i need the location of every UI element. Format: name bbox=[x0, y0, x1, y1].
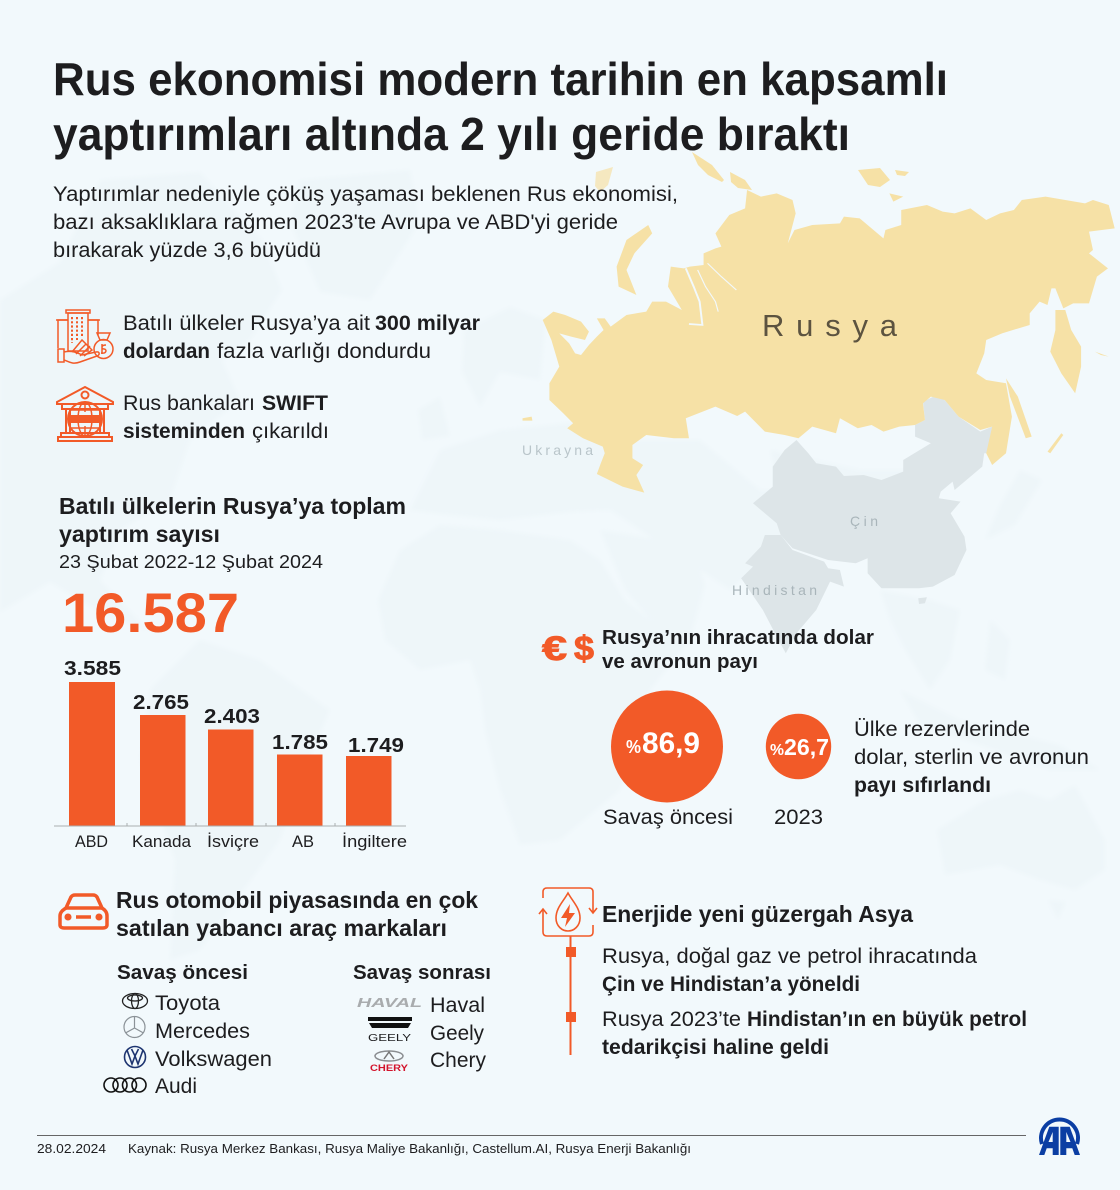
map label: Hindistan: Hindistan bbox=[732, 582, 817, 598]
text: energy notes: Rusya 2023’te bbox=[602, 1007, 741, 1031]
subtitle text block bbox=[53, 182, 678, 262]
bar chart: sanctions by country: 1.785 bbox=[272, 731, 328, 754]
text: reserves note bbox=[854, 717, 1089, 797]
list: post-war brands: GEELY bbox=[368, 1033, 411, 1044]
bar chart: sanctions by country: 3.585 bbox=[64, 657, 121, 680]
icon: euro and dollar bbox=[542, 630, 594, 668]
text: SWIFT removal: Rus bankaları bbox=[123, 392, 255, 415]
text: energy notes: Çin ve Hindistan’a yöneldi bbox=[602, 972, 860, 996]
map label: Rusya: Rusya bbox=[762, 308, 898, 343]
list: post-war brands: Geely bbox=[430, 1021, 484, 1045]
icon: building, hand and money bag bbox=[56, 310, 113, 363]
car section heading: Rus otomobil piyasasında en çok bbox=[116, 887, 479, 913]
bar chart: sanctions by country: 2.403 bbox=[204, 705, 260, 728]
circle: 2023 share: % bbox=[770, 742, 784, 759]
icon: energy drop with arrows bbox=[539, 888, 597, 936]
text: SWIFT removal bbox=[123, 392, 329, 443]
list: pre-war brands: Volkswagen bbox=[155, 1047, 272, 1071]
circle: 2023 share bbox=[766, 714, 831, 829]
text: energy notes: tedarikçisi haline geldi bbox=[602, 1035, 829, 1059]
text: SWIFT removal: sisteminden bbox=[123, 420, 245, 443]
list: pre-war brands: Savaş öncesi bbox=[117, 961, 248, 984]
circle: pre-war share: 86,9 bbox=[642, 727, 700, 760]
subtitle text block: Yaptırımlar nedeniyle çöküş yaşaması beklenen Rus ekonomisi, bbox=[53, 182, 678, 206]
sanctions heading: yaptırım sayısı bbox=[59, 521, 220, 547]
sanctions heading bbox=[59, 493, 406, 572]
list: post-war brands: Haval bbox=[430, 993, 485, 1017]
text: reserves note: dolar, sterlin ve avronun bbox=[854, 745, 1089, 769]
text: frozen assets bbox=[123, 312, 480, 363]
circle: pre-war share: Savaş öncesi bbox=[603, 806, 733, 829]
text: frozen assets: Batılı ülkeler Rusya’ya ait bbox=[123, 312, 370, 335]
map label: Çin: Çin bbox=[850, 513, 878, 529]
text: frozen assets: 300 milyar bbox=[375, 312, 480, 335]
title bbox=[53, 53, 948, 160]
text: frozen assets: fazla varlığı dondurdu bbox=[217, 340, 431, 363]
bar chart: sanctions by country bbox=[54, 657, 407, 851]
footer: Kaynak: Rusya Merkez Bankası, Rusya Maliye Bakanlığı, Castellum.AI, Rusya Enerji Bakanlığı bbox=[128, 1142, 691, 1156]
map: China and India bbox=[741, 396, 992, 653]
bar chart: sanctions by country: ABD bbox=[75, 832, 108, 851]
circle: pre-war share bbox=[603, 690, 733, 829]
text: energy notes: Hindistan’ın en büyük petrol bbox=[747, 1007, 1027, 1031]
car section heading: satılan yabancı araç markaları bbox=[116, 915, 447, 941]
car section heading bbox=[116, 887, 479, 941]
list: post-war brands: Savaş sonrası bbox=[353, 961, 491, 984]
map label: Ukrayna: Ukrayna bbox=[522, 442, 593, 458]
icon: euro and dollar: € bbox=[542, 630, 567, 668]
timeline line with markers bbox=[566, 936, 576, 1055]
currency heading: Rusya’nın ihracatında dolar bbox=[602, 626, 874, 649]
bar chart: sanctions by country: 1.749 bbox=[348, 734, 404, 757]
text: energy notes: Rusya, doğal gaz ve petrol ihracatında bbox=[602, 944, 977, 968]
currency heading bbox=[602, 626, 874, 673]
map: Russia bbox=[523, 152, 1115, 493]
sanctions heading: Batılı ülkelerin Rusya’ya toplam bbox=[59, 493, 406, 519]
icon: car bbox=[60, 895, 107, 928]
logo: AA bbox=[1039, 1120, 1080, 1155]
bar chart: sanctions by country: İngiltere bbox=[342, 832, 407, 851]
footer: 28.02.2024 bbox=[37, 1142, 106, 1156]
bar chart: sanctions by country: 2.765 bbox=[133, 691, 189, 714]
subtitle text block: bazı aksaklıklara rağmen 2023'te Avrupa ve ABD'yi geride bbox=[53, 210, 618, 234]
list: post-war brands: Chery bbox=[430, 1048, 486, 1072]
icon: euro and dollar: $ bbox=[574, 630, 594, 668]
text: SWIFT removal: çıkarıldı bbox=[252, 420, 329, 443]
text: SWIFT removal: SWIFT bbox=[262, 392, 328, 415]
energy heading: Enerjide yeni güzergah Asya bbox=[602, 901, 914, 927]
bar chart: sanctions by country: İsviçre bbox=[207, 832, 259, 851]
currency heading: ve avronun payı bbox=[602, 650, 758, 673]
sanctions heading: 23 Şubat 2022-12 Şubat 2024 bbox=[59, 551, 323, 572]
list: pre-war brands: Audi bbox=[155, 1074, 197, 1098]
list: post-war brands: HAVAL bbox=[357, 995, 422, 1010]
bar chart: sanctions by country: AB bbox=[292, 832, 314, 851]
text: frozen assets: dolardan bbox=[123, 340, 210, 363]
text: reserves note: Ülke rezervlerinde bbox=[854, 717, 1030, 741]
list: post-war brands bbox=[353, 961, 491, 1073]
list: pre-war brands bbox=[104, 961, 272, 1098]
text: energy notes bbox=[602, 944, 1027, 1059]
list: pre-war brands: Toyota bbox=[155, 991, 220, 1015]
list: pre-war brands: Mercedes bbox=[155, 1019, 250, 1043]
text: reserves note: payı sıfırlandı bbox=[854, 773, 991, 797]
subtitle text block: bırakarak yüzde 3,6 büyüdü bbox=[53, 238, 321, 262]
title: Rus ekonomisi modern tarihin en kapsamlı bbox=[53, 53, 948, 105]
title: yaptırımları altında 2 yılı geride bıraktı bbox=[53, 108, 850, 160]
circle: 2023 share: 26,7 bbox=[784, 734, 829, 760]
icon: bank with globe bbox=[57, 387, 113, 441]
list: post-war brands: CHERY bbox=[370, 1063, 408, 1073]
footer bbox=[37, 1135, 1026, 1156]
background world map bbox=[0, 170, 1105, 960]
circle: pre-war share: % bbox=[626, 737, 641, 757]
total number: 16.587 bbox=[62, 581, 239, 644]
circle: 2023 share: 2023 bbox=[774, 806, 823, 829]
bar chart: sanctions by country: Kanada bbox=[132, 832, 192, 851]
